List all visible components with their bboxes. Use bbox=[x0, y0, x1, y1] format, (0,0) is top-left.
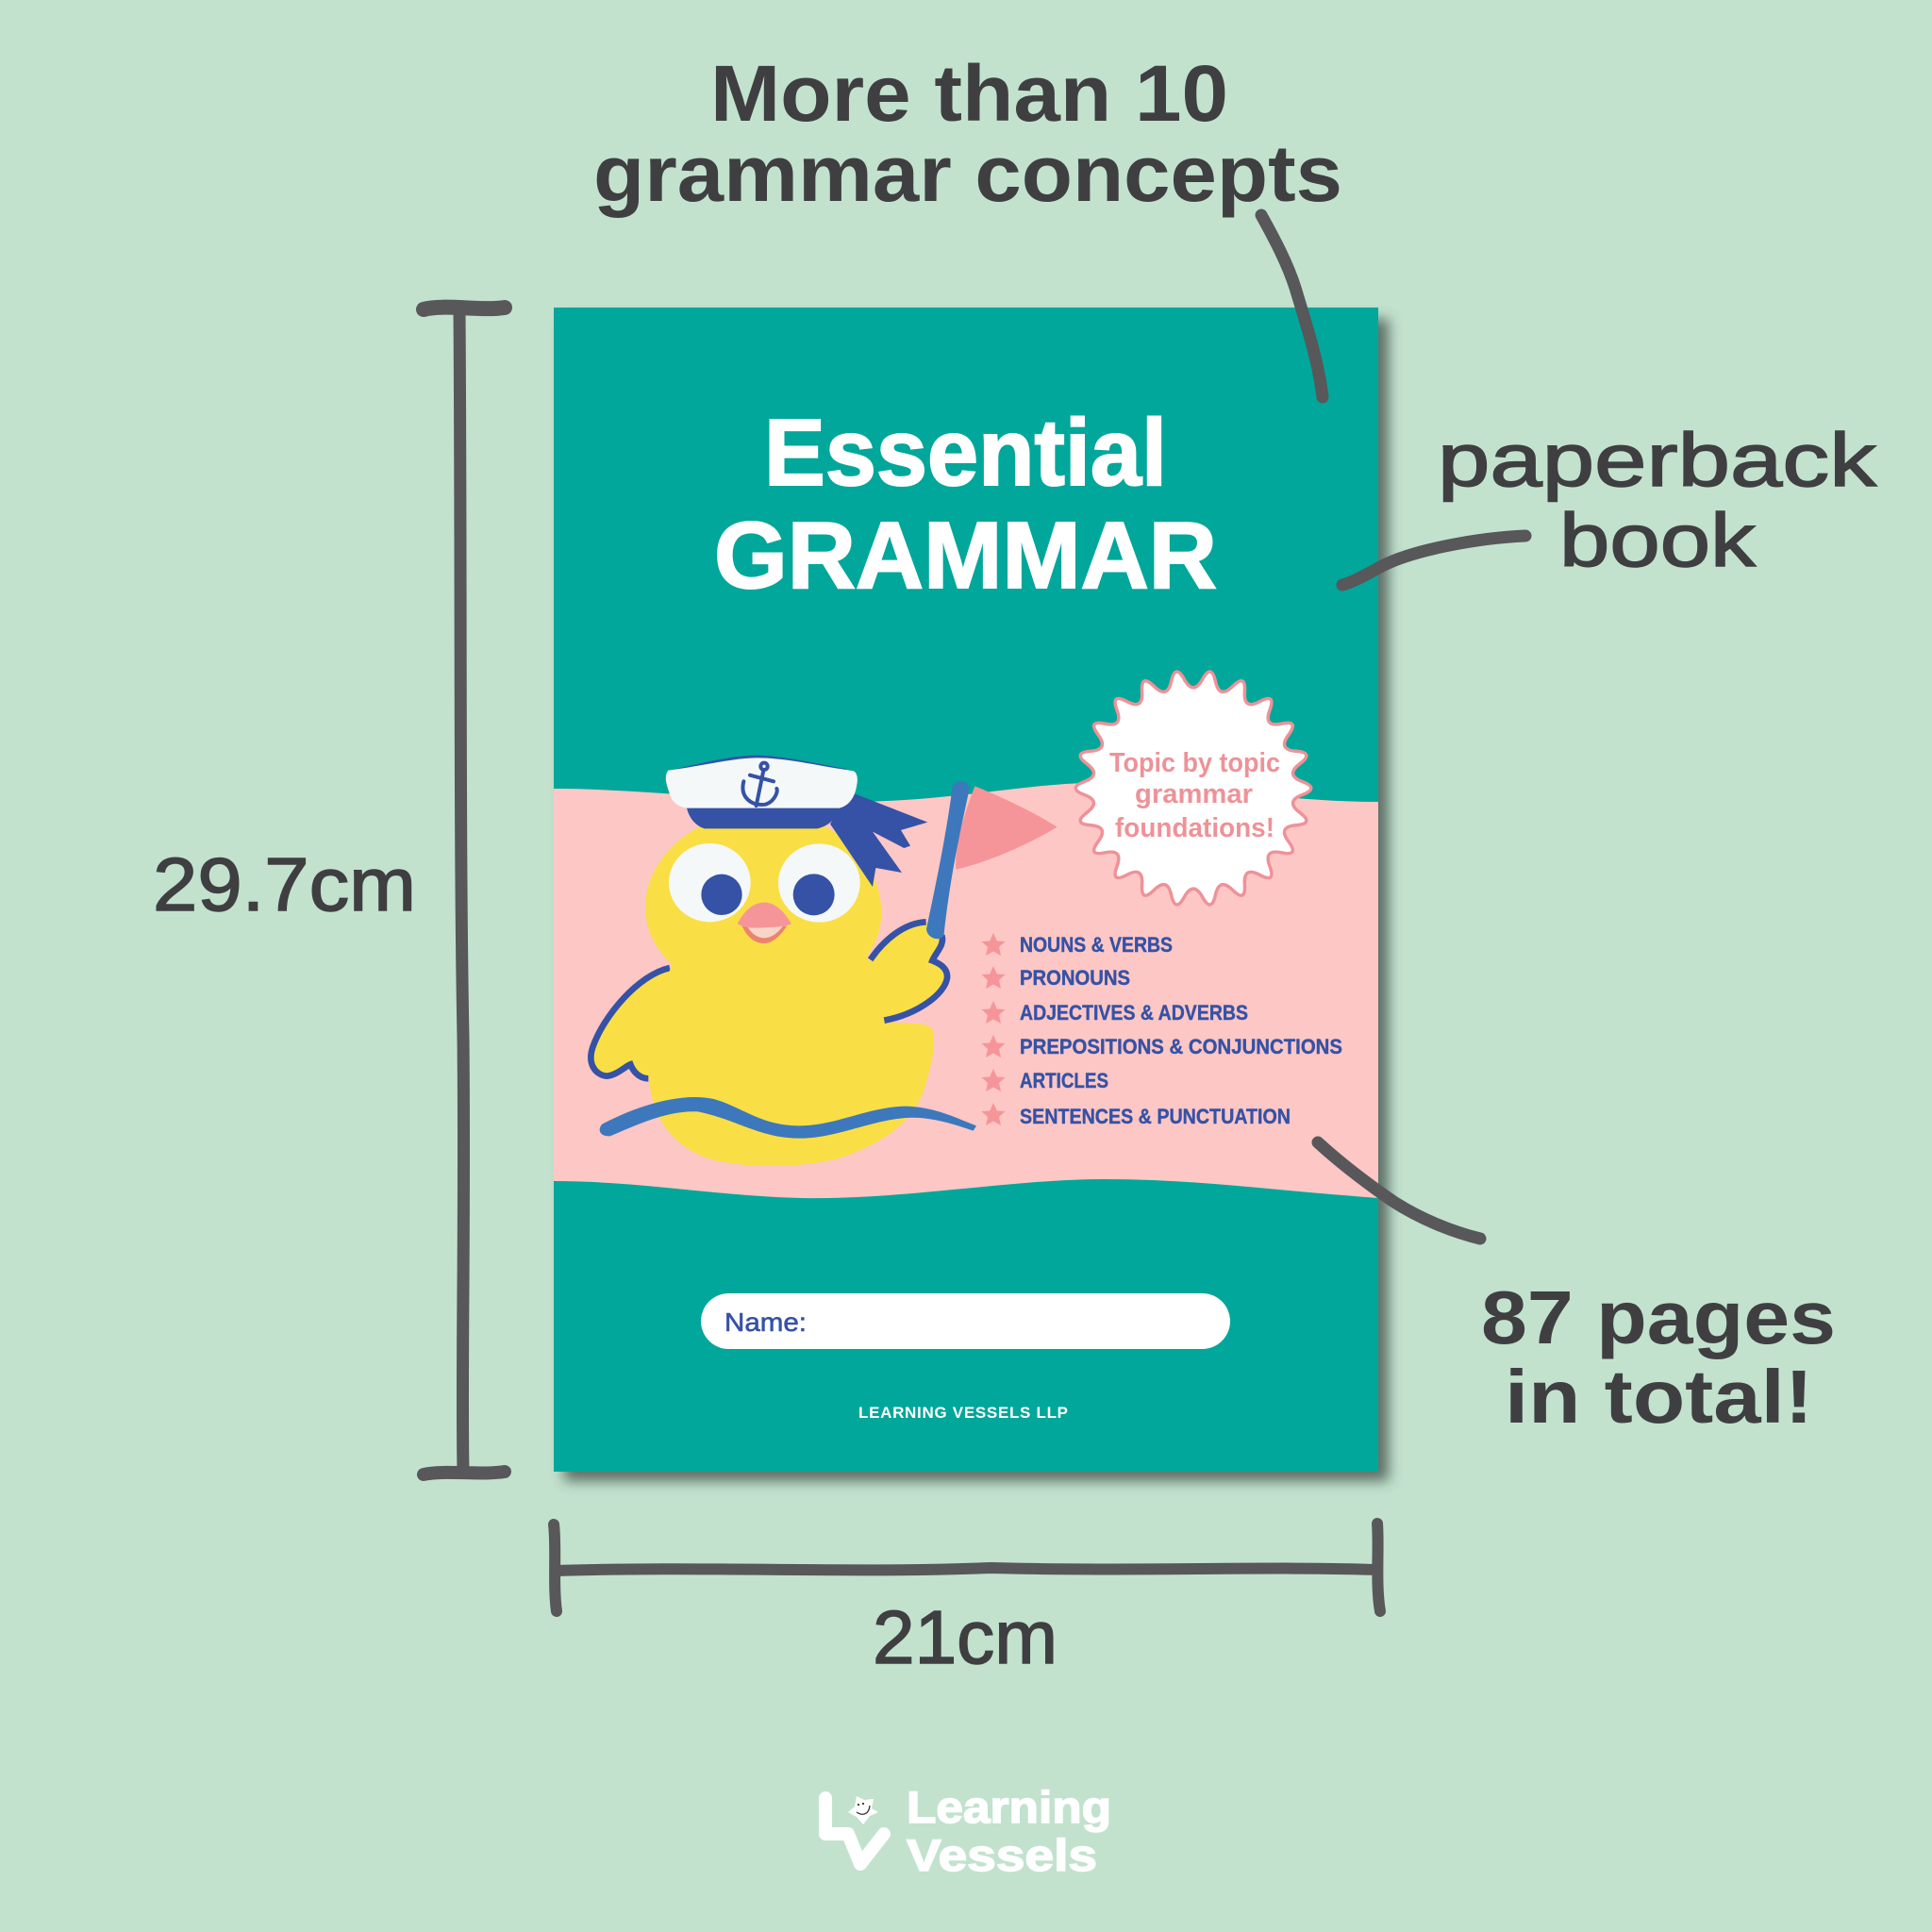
label: 29.7cm: 29.7cm bbox=[153, 842, 416, 926]
star bullets bbox=[981, 933, 1006, 1125]
callout: more than 10 grammar concepts: More than 10 bbox=[710, 49, 1228, 138]
anchor emblem bbox=[742, 763, 777, 806]
topic labels: SENTENCES & PUNCTUATION bbox=[1020, 1105, 1291, 1128]
publisher line: LEARNING VESSELS LLP bbox=[858, 1404, 1068, 1422]
callout: more than 10 grammar concepts bbox=[593, 49, 1342, 218]
logo mark bbox=[825, 1796, 884, 1864]
topic labels: ARTICLES bbox=[1020, 1069, 1108, 1092]
logo wordmark: Learning bbox=[907, 1782, 1111, 1832]
heading: book title: Essential bbox=[764, 400, 1167, 506]
callout: 87 pages in total: in total! bbox=[1505, 1355, 1813, 1439]
heading: book title: GRAMMAR bbox=[714, 503, 1217, 608]
name field bbox=[701, 1293, 1230, 1349]
callout: paperback book bbox=[1438, 418, 1877, 582]
topic labels bbox=[1020, 933, 1342, 1128]
water ripple bbox=[600, 1097, 976, 1139]
topic labels: ADJECTIVES & ADVERBS bbox=[1020, 1001, 1248, 1024]
logo: Learning Vessels bbox=[825, 1782, 1111, 1880]
topic labels: PRONOUNS bbox=[1020, 966, 1130, 990]
badge: topic by topic burst bbox=[1075, 672, 1311, 905]
callout: paperback book: book bbox=[1559, 498, 1757, 582]
flag pole bbox=[926, 781, 969, 939]
arrow: to top of book bbox=[1261, 215, 1323, 397]
duck right wing bbox=[849, 922, 949, 1021]
logo wordmark bbox=[907, 1782, 1111, 1880]
badge text: Topic by topic bbox=[1109, 748, 1280, 778]
callout: 87 pages in total bbox=[1481, 1275, 1836, 1439]
callout: paperback book: paperback bbox=[1438, 418, 1877, 502]
duck body bbox=[648, 956, 934, 1166]
pink wave band bbox=[554, 783, 1378, 1198]
icon: sailor duck with flag bbox=[591, 756, 1058, 1166]
book shadow bbox=[564, 319, 1389, 1481]
sailor hat bbox=[666, 756, 927, 887]
arrow: to pages bbox=[1318, 1142, 1480, 1239]
arrow: to book cover bbox=[1342, 536, 1525, 585]
duck head bbox=[645, 811, 881, 993]
duck beak bbox=[738, 903, 791, 943]
panel: book cover bbox=[554, 308, 1378, 1472]
callout: 87 pages in total: 87 pages bbox=[1481, 1275, 1836, 1359]
label: 21cm: 21cm bbox=[873, 1595, 1058, 1679]
heading: book title bbox=[714, 400, 1217, 608]
callout: more than 10 grammar concepts: grammar concepts bbox=[593, 129, 1342, 218]
duck left wing bbox=[591, 968, 673, 1079]
topic labels: NOUNS & VERBS bbox=[1020, 933, 1173, 957]
dimension: height bracket bbox=[424, 308, 505, 1474]
duck eyes bbox=[669, 843, 860, 923]
list: grammar topics bbox=[981, 933, 1342, 1128]
badge text: grammar bbox=[1135, 779, 1253, 809]
name field: Name: bbox=[724, 1307, 807, 1337]
topic labels: PREPOSITIONS & CONJUNCTIONS bbox=[1020, 1035, 1342, 1058]
logo wordmark: Vessels bbox=[907, 1830, 1097, 1880]
dimension: width bracket bbox=[554, 1524, 1380, 1611]
badge text: foundations! bbox=[1115, 813, 1274, 843]
badge text bbox=[1109, 748, 1280, 843]
